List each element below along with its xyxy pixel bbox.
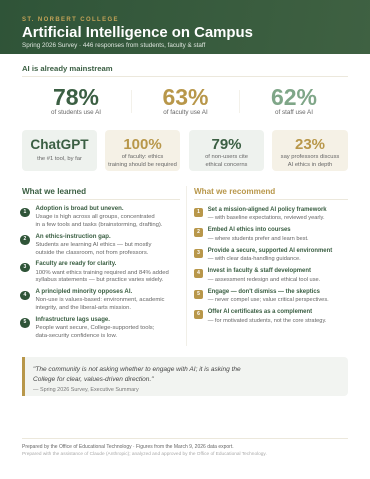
- item 4 number: [20, 291, 30, 300]
- rec 2 text: Embed AI ethics into courses: [208, 227, 291, 233]
- label: of staff use AI: [275, 109, 313, 116]
- source line: Prepared by the Office of Educational Technology · Figures from the March 9, 2026 data export.: [22, 444, 234, 450]
- rec 1 number: [194, 208, 203, 217]
- panel: what we learned: [20, 187, 180, 339]
- card value: 100%: [123, 136, 162, 152]
- rec 5 number: [194, 290, 203, 299]
- item 5 title: Infrastructure lags usage.: [36, 316, 110, 323]
- card: 79%: ethical concerns: [206, 162, 247, 168]
- stat: faculty: [162, 84, 209, 116]
- card: 100%: [105, 130, 180, 171]
- card label: of faculty: ethics: [122, 154, 163, 160]
- rec 2 number: 2: [197, 229, 200, 235]
- rec 1 text: Set a mission-aligned AI policy framework: [208, 206, 327, 212]
- item 4 number: 4: [24, 292, 26, 298]
- item 3 text: 100% want ethics training required and 84% added: [36, 270, 169, 276]
- stat: staff: [271, 84, 317, 116]
- callout: quote: [22, 357, 348, 396]
- attribution: — Spring 2026 Survey, Executive Summary: [33, 386, 139, 392]
- rec 4 number: 4: [197, 270, 200, 276]
- panel: what we learned: outside the classroom, not from professors.: [36, 250, 148, 256]
- rec 3 number: 3: [197, 250, 200, 256]
- value 78%: 78%: [53, 84, 99, 110]
- panel: what we recommend: — where students prefer and learn best.: [208, 236, 309, 242]
- rec 1 number: 1: [197, 209, 200, 215]
- panel: what we learned: in a few tools and tasks (brainstorming, drafting).: [36, 222, 163, 228]
- heading: What we learned: [22, 187, 86, 196]
- value 62%: 62%: [271, 84, 317, 110]
- card value: 23%: [295, 136, 325, 152]
- card: 100%: training should be required: [108, 162, 177, 168]
- panel: what we recommend: — with clear data-handling guidance.: [208, 256, 301, 262]
- item 3 number: 3: [24, 264, 26, 270]
- card: 23%: AI ethics in depth: [288, 162, 332, 168]
- card: ChatGPT: [22, 130, 97, 171]
- panel: what we learned: data-security confidence is low.: [36, 333, 117, 339]
- callout: quote: College for clear, values-driven direction.": [33, 376, 154, 383]
- quote text: "The community is not asking whether to engage with AI; it is asking the: [33, 366, 241, 373]
- panel: what we recommend: — assessment redesign and ethical tool use.: [208, 276, 320, 282]
- card: 23%: [272, 130, 348, 171]
- item 2 number: 2: [24, 236, 26, 242]
- label: of students use AI: [51, 109, 101, 116]
- card value: ChatGPT: [30, 136, 89, 152]
- heading: What we recommend: [194, 187, 275, 196]
- item 1 number: [20, 208, 30, 217]
- title: Artificial Intelligence on Campus: [22, 25, 253, 41]
- item 1 title: Adoption is broad but uneven.: [36, 205, 124, 212]
- panel: what we recommend: [194, 187, 348, 324]
- panel: what we learned: syllabus statements — but practice varies widely.: [36, 277, 163, 283]
- item 1 number: 1: [24, 208, 26, 214]
- item 2 number: [20, 235, 30, 245]
- item 3 title: Faculty are ready for clarity.: [36, 260, 116, 267]
- card label: say professors discuss: [281, 154, 339, 160]
- stat: students: [51, 84, 101, 116]
- subtitle: Spring 2026 Survey · 446 responses from students, faculty & staff: [22, 42, 205, 49]
- rec 4 text: Invest in faculty & staff development: [208, 268, 311, 274]
- item 5 number: 5: [24, 319, 26, 325]
- disclosure line: Prepared with the assistance of Claude (Anthropic); analyzed and approved by the Office of Educational Technology.: [22, 452, 267, 457]
- item 4 text: Non-use is values-based: environment, academic: [36, 297, 165, 303]
- eyebrow: college name: ST. NORBERT COLLEGE: [22, 17, 119, 23]
- item 4 title: A principled minority opposes AI.: [36, 288, 132, 295]
- rec 6 number: [194, 310, 203, 319]
- label: of faculty use AI: [163, 109, 208, 116]
- accent bar: [22, 357, 24, 396]
- item 2 title: An ethics-instruction gap.: [36, 233, 111, 240]
- footer: [22, 444, 267, 457]
- section heading: mainstream: AI is already mainstream: [22, 64, 113, 73]
- rec 3 number: [194, 249, 203, 258]
- rec 5 text: Engage — don't dismiss — the skeptics: [208, 288, 320, 294]
- item 3 number: [20, 263, 30, 272]
- rec 2 number: [194, 228, 203, 237]
- panel: what we recommend: — for motivated students, not the core strategy.: [208, 318, 326, 324]
- panel: what we recommend: — never compel use; value critical perspectives.: [208, 297, 329, 303]
- value 63%: 63%: [162, 84, 209, 110]
- card label: of non-users cite: [205, 154, 248, 160]
- rec 5 number: 5: [197, 291, 200, 297]
- card: 79%: [189, 130, 264, 171]
- card value: 79%: [211, 136, 242, 152]
- rec 3 text: Provide a secure, supported AI environment: [208, 248, 332, 254]
- item 2 text: Students are learning AI ethics — but mostly: [36, 242, 151, 248]
- panel: what we recommend: — with baseline expectations, reviewed yearly.: [208, 215, 325, 221]
- header banner: [0, 0, 370, 54]
- card label: the #1 tool, by far: [37, 156, 82, 162]
- item 5 number: [20, 318, 30, 328]
- item 1 text: Usage is high across all groups, concentrated: [36, 214, 155, 220]
- item 5 text: People want secure, College-supported tools;: [36, 325, 154, 331]
- rec 6 text: Offer AI certificates as a complement: [208, 309, 312, 315]
- rec 4 number: [194, 269, 203, 278]
- rec 6 number: 6: [197, 311, 200, 317]
- panel: what we learned: integrity, and the liberal-arts mission.: [36, 305, 131, 311]
